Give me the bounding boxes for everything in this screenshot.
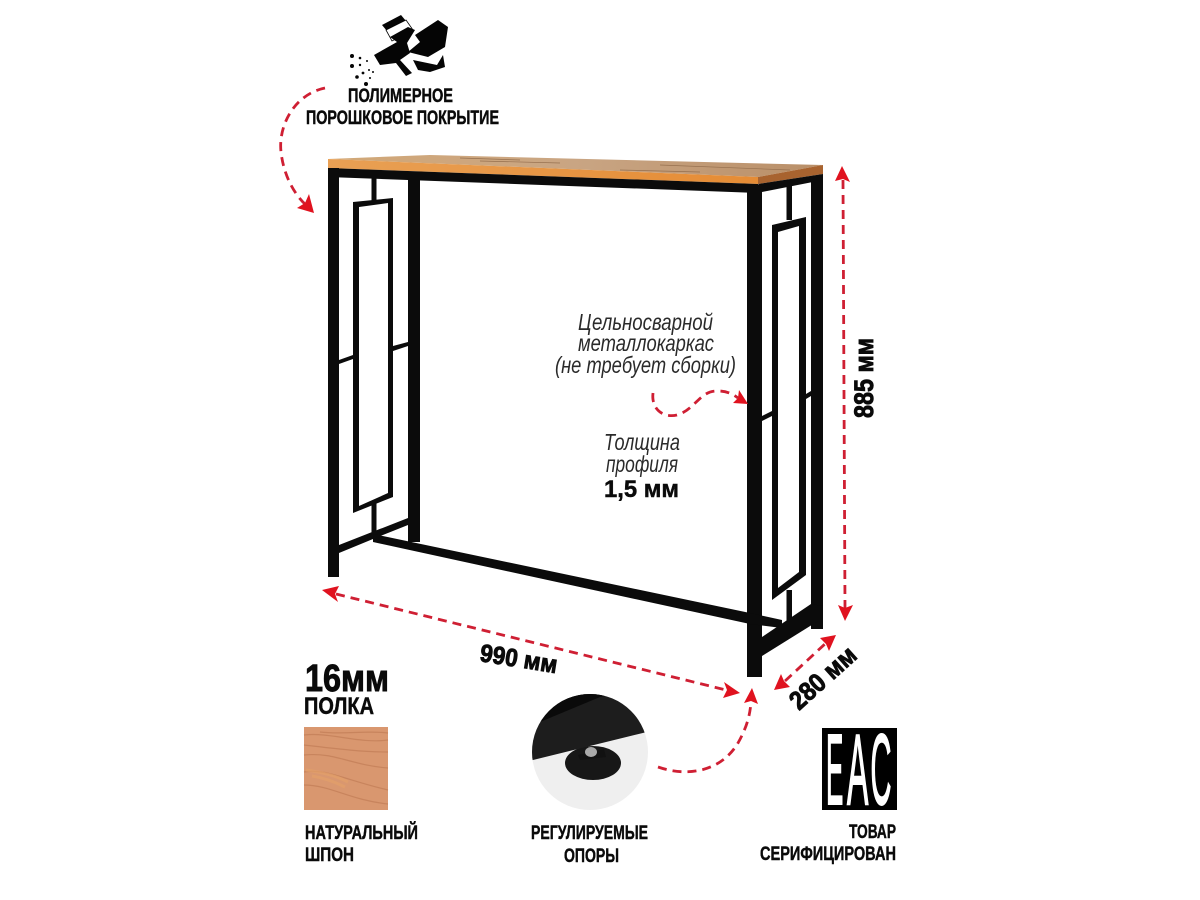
label: certified product (760, 822, 896, 865)
callout: welded frame (555, 309, 736, 378)
console table (328, 155, 823, 677)
shelf thickness heading (304, 658, 389, 720)
label: adjustable feet (531, 823, 648, 867)
arrow: coating to frame (281, 88, 325, 213)
photo: adjustable foot (532, 694, 648, 810)
dimension: width (322, 586, 740, 698)
callout: welded frame: (не требует сборки) (555, 352, 736, 378)
callout: profile thickness: профиля (606, 451, 678, 477)
shelf thickness heading: ПОЛКА (304, 693, 374, 720)
metal frame (328, 168, 823, 677)
tabletop (328, 155, 823, 184)
wood veneer swatch (304, 727, 388, 810)
icon: EAC mark: A (847, 714, 869, 826)
callout: profile thickness: 1,5 мм (604, 476, 679, 503)
heading: powder coating: ПОРОШКОВОЕ ПОКРЫТИЕ (306, 108, 499, 129)
icon: EAC mark (822, 713, 897, 826)
dimension: depth: 280 мм (783, 640, 862, 715)
callout: welded frame: Цельносварной (578, 309, 713, 335)
callout: welded frame: металлокаркас (578, 330, 714, 356)
icon: powder coating spray gun (350, 15, 448, 86)
shelf thickness heading: 16мм (305, 658, 389, 700)
arrow: callout to frame (653, 390, 748, 416)
arrow: foot to table leg (658, 688, 758, 772)
dimension: width: 990 мм (478, 639, 559, 679)
label: certified product: ТОВАР (849, 822, 896, 843)
label: adjustable feet: ОПОРЫ (564, 846, 619, 867)
callout: profile thickness (604, 429, 680, 503)
callout: profile thickness: Толщина (604, 429, 680, 455)
heading: powder coating: ПОЛИМЕРНОЕ (348, 86, 453, 107)
heading: powder coating (306, 86, 499, 129)
label: adjustable feet: РЕГУЛИРУЕМЫЕ (531, 823, 648, 844)
dimension: height (835, 166, 879, 621)
label: certified product: СЕРИФИЦИРОВАН (760, 844, 896, 865)
icon: EAC mark: C (870, 713, 891, 826)
label: natural veneer (305, 822, 418, 866)
label: natural veneer: НАТУРАЛЬНЫЙ (305, 822, 418, 844)
label: natural veneer: ШПОН (305, 845, 354, 866)
icon: EAC mark: E (826, 715, 843, 826)
dimension: height: 885 мм (849, 338, 879, 418)
